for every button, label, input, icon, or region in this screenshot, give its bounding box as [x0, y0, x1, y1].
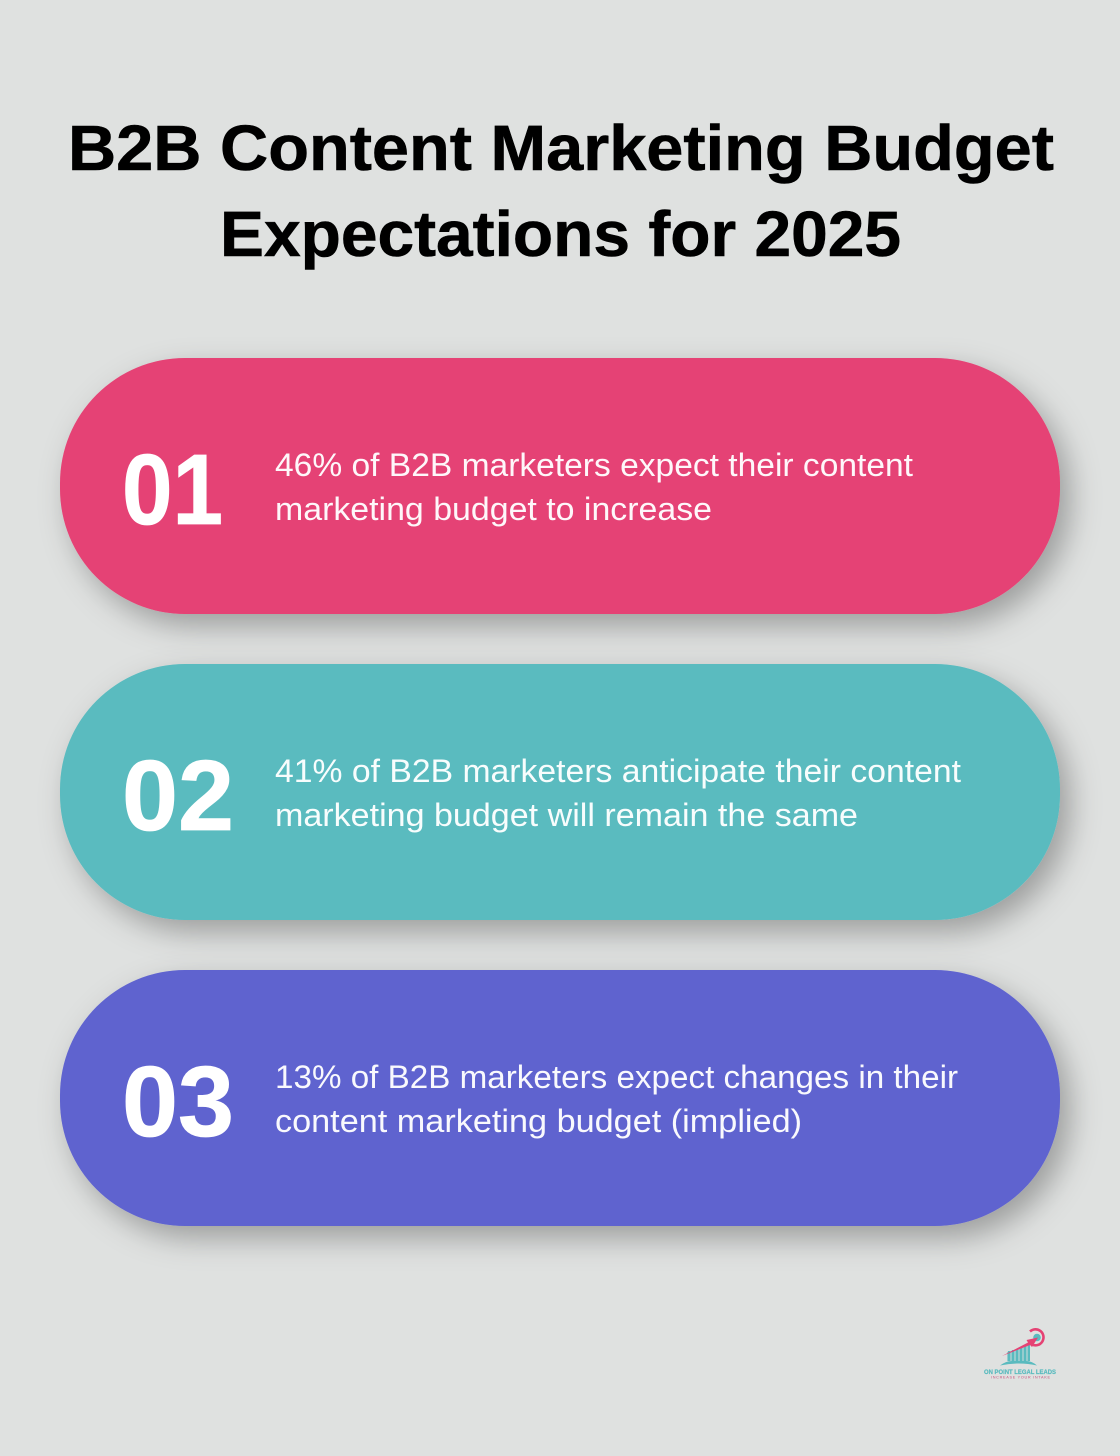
title: B2B Content Marketing Budget [68, 112, 1054, 184]
number 02: 02 [122, 740, 234, 852]
number 01: 01 [122, 434, 223, 546]
logo: On Point Legal Leads [984, 1329, 1057, 1380]
title: Expectations for 2025 [220, 198, 901, 270]
number 03: 03 [122, 1046, 234, 1158]
logo name: ON POINT LEGAL LEADS [984, 1369, 1057, 1376]
text block 03: content marketing budget (implied) [275, 1103, 802, 1139]
text block 01: 46% of B2B marketers expect their content [275, 447, 913, 483]
panel: 01 increase [60, 358, 1060, 614]
text block 02: 41% of B2B marketers anticipate their content [275, 753, 961, 789]
text block 02: marketing budget will remain the same [275, 797, 858, 833]
icon: target [1030, 1329, 1044, 1345]
panel: 03 changes [60, 970, 1060, 1226]
text block 02 [275, 753, 961, 833]
text block 01 [275, 447, 913, 527]
text block 03: 13% of B2B marketers expect changes in their [275, 1059, 958, 1095]
text block 03 [275, 1059, 958, 1139]
icon: building bars [1000, 1345, 1037, 1366]
logo tagline: INCREASE YOUR INTAKE [991, 1376, 1050, 1380]
text block 01: marketing budget to increase [275, 491, 712, 527]
title [68, 112, 1054, 270]
icon: arrow [1002, 1338, 1038, 1356]
panel: 02 remain the same [60, 664, 1060, 920]
